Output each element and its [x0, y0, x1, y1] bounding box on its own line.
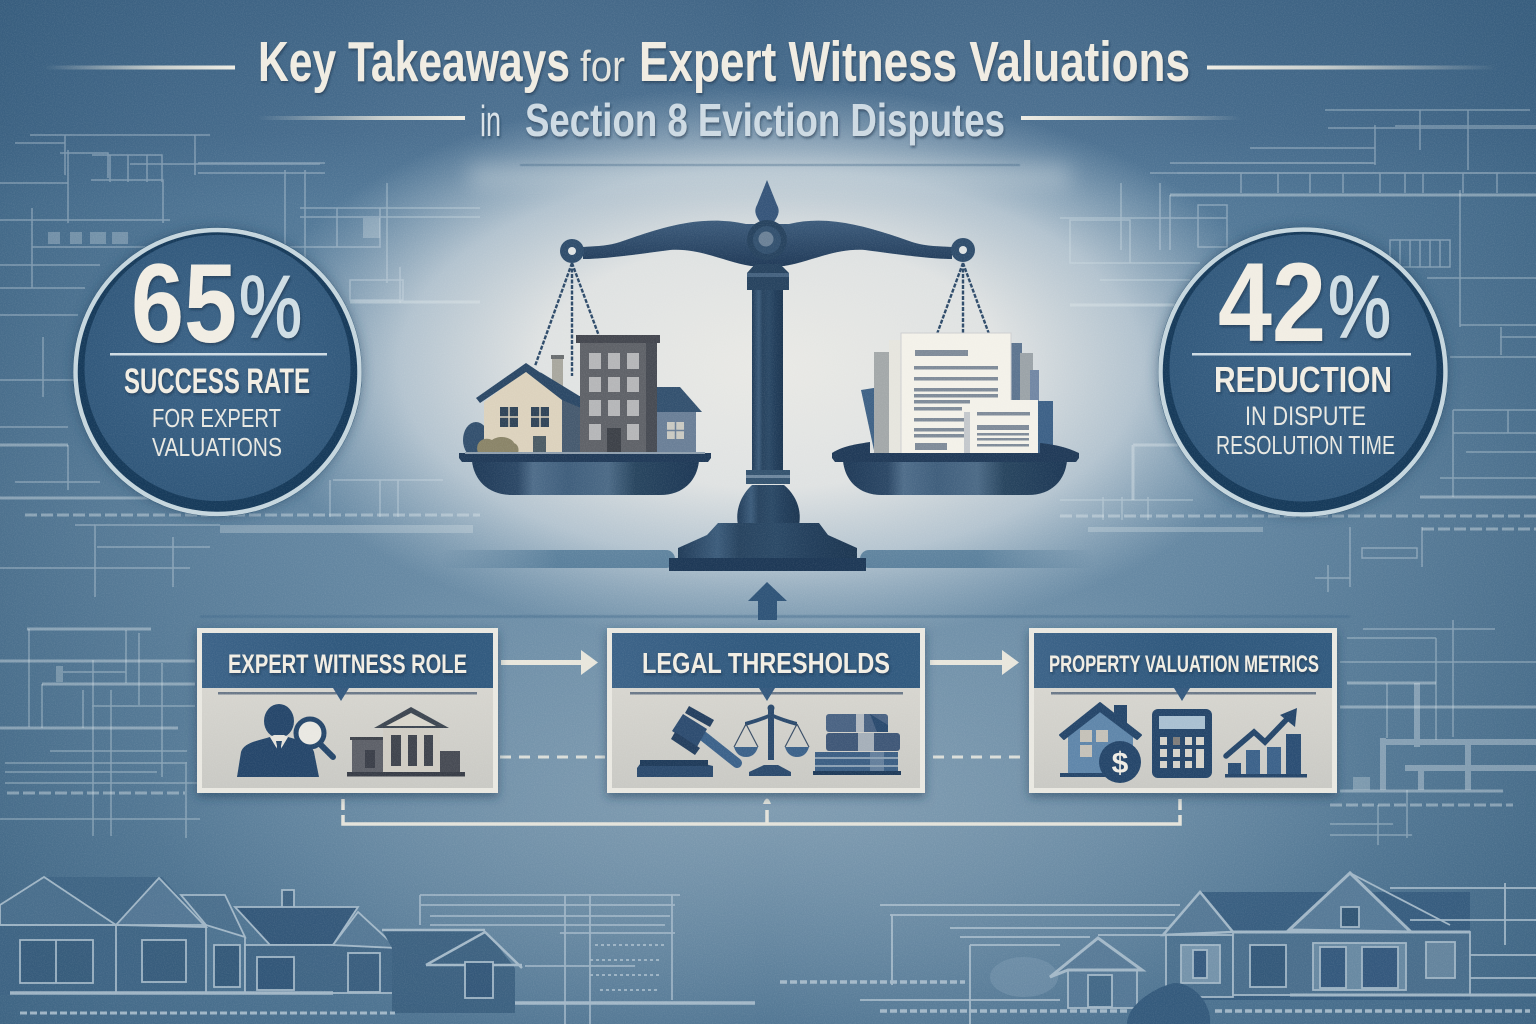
heading: EXPERT WITNESS ROLE — [228, 649, 467, 679]
stat circle: 65% success rate: SUCCESS RATE — [124, 362, 310, 401]
stat circle: 42% reduction — [1158, 227, 1448, 517]
title: in — [480, 97, 501, 146]
arrow: up to scale — [748, 582, 787, 620]
stat circle: 42% reduction: REDUCTION — [1214, 359, 1392, 400]
stat circle: 65% success rate — [73, 228, 362, 516]
title: Key Takeaways — [258, 30, 570, 94]
houses silhouette: right row — [420, 873, 1536, 1024]
blueprint line pattern: decorative — [0, 110, 1536, 845]
beam end rings — [560, 238, 975, 263]
icon: books — [813, 714, 901, 775]
icon: gavel — [637, 706, 737, 777]
panel: property valuation metrics — [1029, 628, 1337, 793]
finial — [755, 180, 779, 223]
arrow: thresholds to metrics — [930, 650, 1019, 675]
stat value: 42%: 42 — [1218, 240, 1326, 365]
panel: expert witness role — [197, 628, 498, 793]
stat circle: 42% reduction: RESOLUTION TIME — [1216, 430, 1395, 460]
arrow: role to thresholds — [501, 650, 598, 675]
stat value: 65%: % — [239, 257, 302, 356]
property on left pan — [463, 335, 702, 458]
scale shadow — [440, 550, 1095, 568]
heading: LEGAL THRESHOLDS — [642, 648, 890, 680]
stat value: 65%: 65 — [131, 241, 237, 366]
icon: courthouse — [347, 707, 465, 776]
icon: growth chart — [1225, 708, 1307, 778]
bracket connector — [343, 798, 1180, 824]
icon: balance scale — [440, 180, 1095, 571]
title — [44, 30, 1497, 146]
stat value: 42%: % — [1328, 257, 1391, 356]
panel: legal thresholds — [607, 628, 925, 793]
documents on right pan — [861, 333, 1053, 455]
icon: house with dollar coin: $ — [1112, 747, 1129, 780]
houses silhouette: left row — [0, 877, 522, 1013]
icon: house with dollar coin — [1060, 703, 1141, 783]
stat circle: 65% success rate: FOR EXPERT — [152, 403, 281, 433]
icon: small scale — [734, 704, 809, 776]
stat circle: 65% success rate: VALUATIONS — [152, 432, 282, 462]
title: Section 8 Eviction Disputes — [525, 94, 1005, 146]
stat circle: 42% reduction: IN DISPUTE — [1245, 401, 1366, 431]
dashed connectors — [500, 756, 1027, 758]
pans — [459, 442, 1079, 495]
title: for — [580, 42, 625, 91]
icon: expert with magnifier — [237, 704, 333, 777]
chains — [535, 263, 989, 376]
hub — [747, 220, 787, 260]
beam — [583, 221, 952, 266]
title: Expert Witness Valuations — [639, 30, 1190, 94]
base — [669, 523, 866, 571]
heading: PROPERTY VALUATION METRICS — [1049, 651, 1319, 678]
column — [737, 264, 800, 525]
icon: calculator — [1152, 709, 1212, 778]
